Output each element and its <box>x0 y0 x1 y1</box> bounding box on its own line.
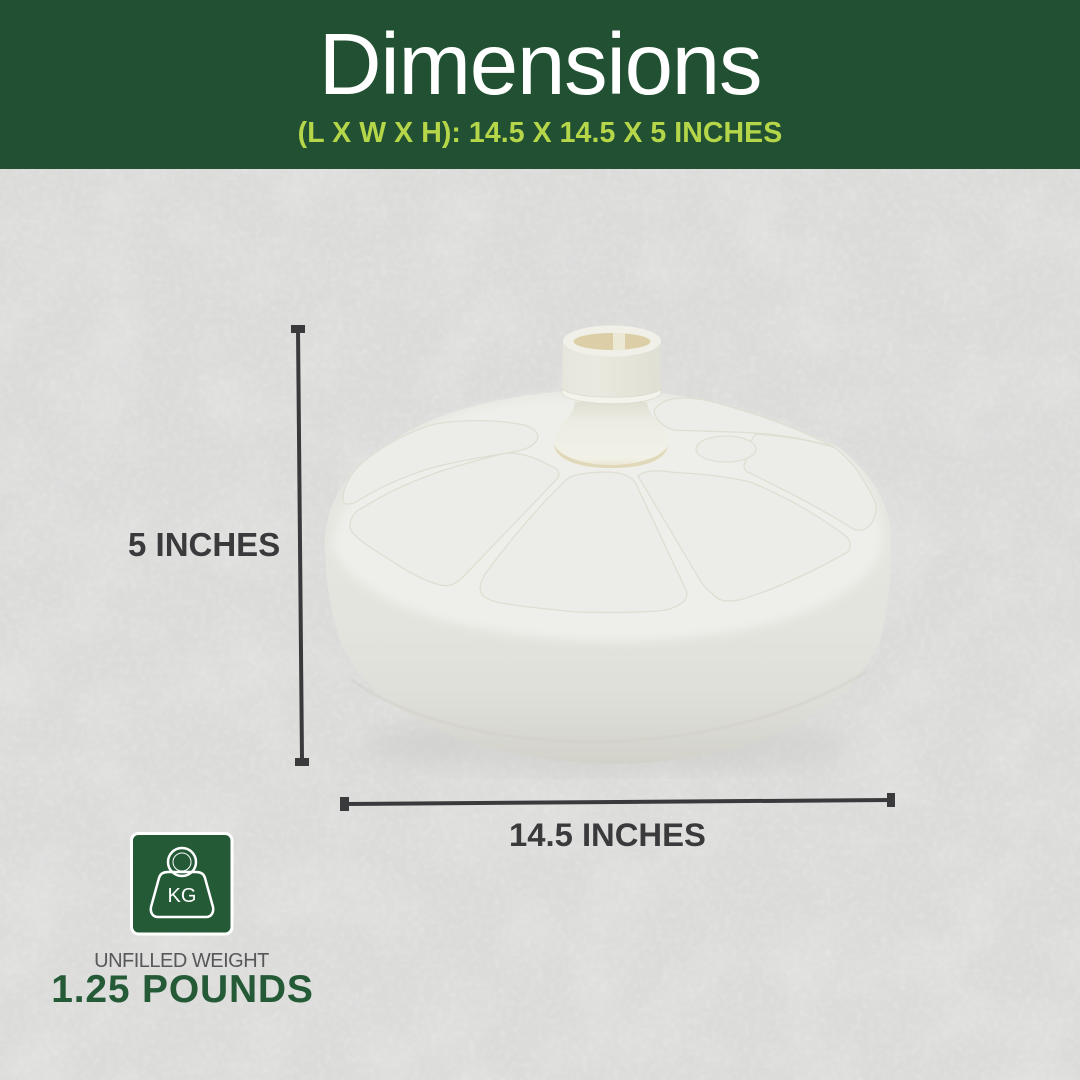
segment panels on top <box>343 398 876 613</box>
height label: 5 INCHES <box>128 526 280 563</box>
panel 1 <box>343 421 538 504</box>
lower rim line <box>352 672 866 742</box>
weight caption: UNFILLED WEIGHT <box>94 950 269 972</box>
panel 6 <box>654 398 834 447</box>
icon: weight: KG <box>168 885 196 907</box>
collar flange <box>562 389 661 404</box>
collar <box>562 342 661 400</box>
base body <box>325 392 891 764</box>
panel 3 <box>480 472 687 613</box>
fill cap <box>696 436 756 462</box>
neck base rim <box>554 445 668 468</box>
product: umbrella base <box>325 326 891 773</box>
panel 5 <box>744 434 876 530</box>
weight value: 1.25 POUNDS <box>51 968 314 1011</box>
subtitle: (L X W X H): 14.5 X 14.5 X 5 INCHES <box>298 117 782 149</box>
icon: weight <box>132 834 232 934</box>
vertical dimension line <box>291 325 309 766</box>
shadow under base <box>365 717 855 773</box>
panel 4 <box>638 471 850 601</box>
top surface <box>332 396 882 642</box>
neck <box>554 402 668 468</box>
title: Dimensions <box>319 16 761 113</box>
collar lip <box>563 326 661 356</box>
width label: 14.5 INCHES <box>509 816 706 853</box>
horizontal dimension line <box>340 793 895 811</box>
collar opening <box>574 333 650 350</box>
header band <box>0 0 1080 169</box>
panel 2 <box>350 453 559 586</box>
